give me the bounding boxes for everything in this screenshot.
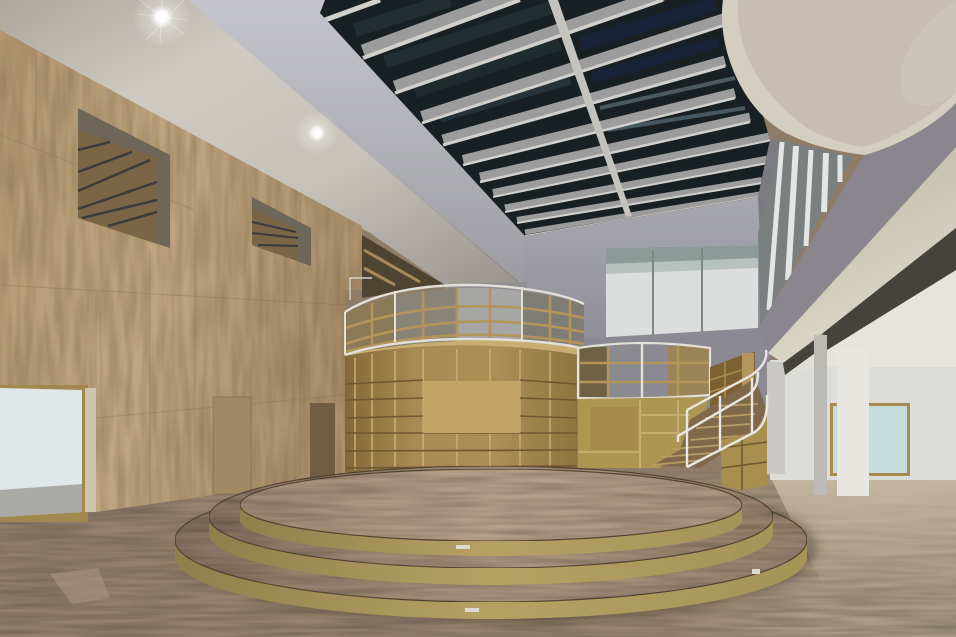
ceiling spotlight: small: [295, 111, 339, 155]
tower shelf cells: [355, 349, 550, 472]
door jamb: [85, 388, 96, 512]
stair railing: [678, 350, 767, 467]
floor: [0, 470, 956, 637]
tower body: [345, 340, 578, 472]
ceiling: left soffit: [0, 0, 527, 290]
left wooden wall: [0, 30, 362, 512]
lower grey wall band: [527, 328, 770, 420]
stage: top step: [240, 469, 742, 556]
stair base shelves: [720, 412, 767, 490]
skylight beam soffits: [325, 0, 772, 236]
right glazed wall: [758, 140, 853, 327]
ceiling beam: grey sloped band: [188, 0, 527, 283]
overhead round soffit: [722, 0, 956, 155]
stair opening behind tower: [362, 235, 527, 345]
rail behind gallery: [350, 278, 372, 300]
lower round bookshelf unit: [578, 343, 710, 468]
back window: glazed upper room: [606, 245, 758, 340]
skylight grid: [320, 0, 780, 240]
stage shadow: [182, 474, 818, 622]
large wall opening with timber slats: [78, 108, 170, 248]
room window: [830, 403, 910, 476]
skylight beam side faces: [363, 0, 772, 232]
tower central panel: [423, 381, 520, 433]
columns: [814, 335, 869, 496]
back wall: [525, 197, 760, 345]
curved shelving behind stair: [710, 352, 755, 420]
bookshelf tower: [345, 278, 585, 472]
dark door: [310, 403, 335, 480]
louvre band: large: [823, 228, 956, 350]
right diagonal grey beam: [758, 103, 956, 353]
gallery railing: [345, 285, 584, 355]
louvre band: small: [783, 340, 815, 375]
bookshelf unit base: [578, 397, 708, 468]
stage outlet plates: [456, 545, 760, 612]
ceiling spotlight: large: [132, 0, 192, 47]
skylight cross beam: [548, 0, 632, 217]
right room beyond: [767, 270, 956, 480]
stage: middle step: [209, 466, 773, 585]
small wall opening with timber slats: [252, 197, 311, 266]
left bright doorway: [0, 385, 88, 522]
skylight glass tints: [355, 0, 745, 130]
tower top band: [347, 342, 577, 352]
wooden door: [213, 397, 251, 494]
right ceiling soffit: [768, 147, 956, 363]
grey pillar by glazed wall: [758, 140, 784, 240]
spiral stair: [653, 350, 767, 490]
tower upper gallery: [346, 288, 584, 354]
stage: bottom step: [175, 478, 807, 619]
